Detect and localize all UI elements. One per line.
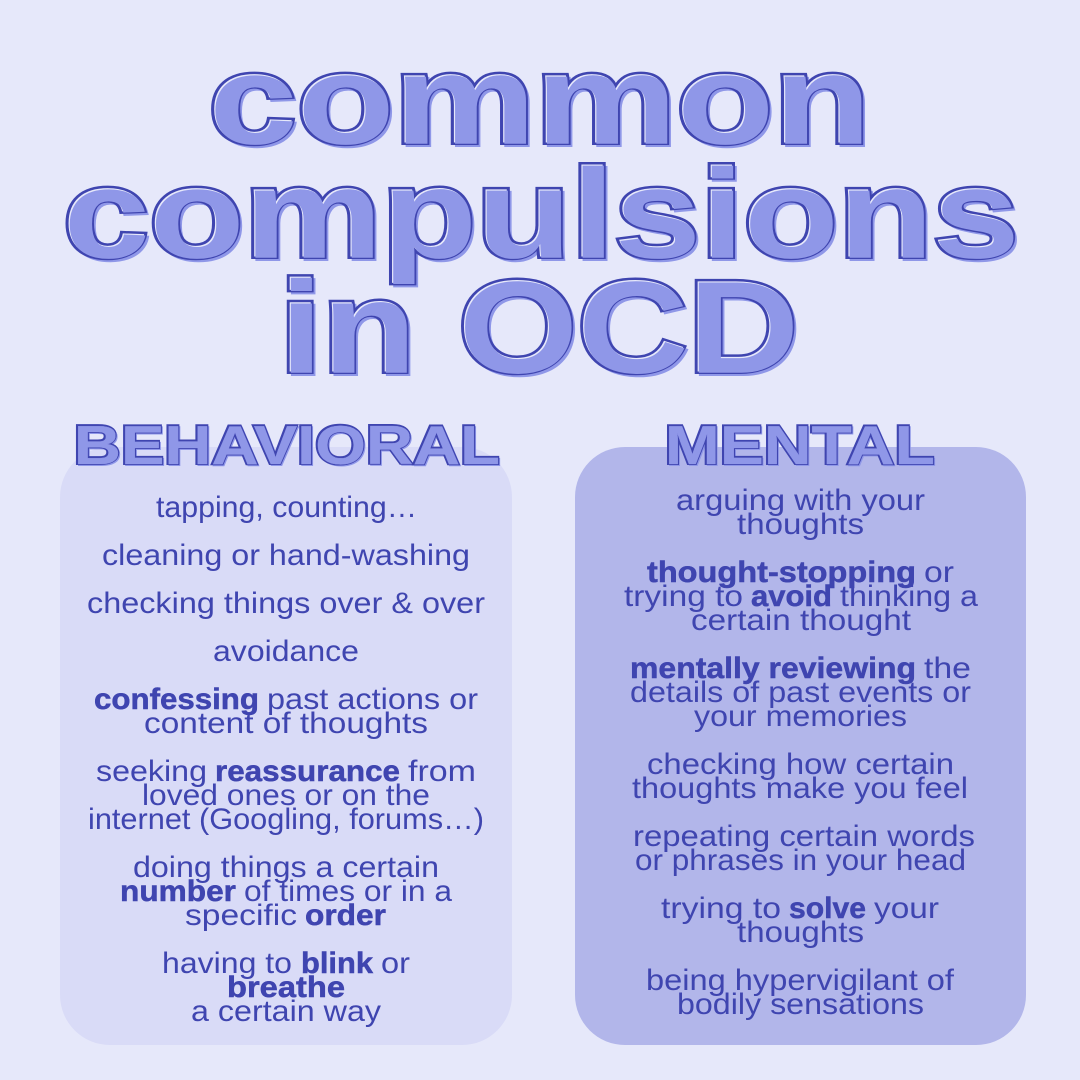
list: behavioral compulsions: or — [381, 947, 410, 980]
list: mental compulsions: certain thought — [691, 604, 912, 637]
heading: mental: MENTAL — [665, 414, 935, 476]
list: behavioral compulsions — [87, 491, 485, 1028]
list: behavioral compulsions: blink — [301, 947, 373, 980]
list: mental compulsions: arguing with your — [676, 484, 925, 517]
list: mental compulsions: your — [874, 892, 939, 925]
title line: common: common — [208, 28, 870, 170]
list: mental compulsions: or — [924, 556, 954, 589]
title line: in OCD: in OCD — [279, 252, 798, 400]
list: behavioral compulsions: number — [120, 875, 236, 908]
list: behavioral compulsions: breathe — [227, 971, 345, 1004]
list: mental compulsions: the — [924, 652, 971, 685]
title line: in OCD: in OCD — [282, 256, 801, 402]
list: behavioral compulsions: avoidance — [213, 635, 359, 668]
list: behavioral compulsions: checking things over & over — [87, 587, 485, 620]
list: behavioral compulsions: internet (Googling, forums…) — [88, 803, 484, 836]
list: behavioral compulsions: having to — [162, 947, 292, 980]
list: behavioral compulsions: past actions or — [267, 683, 478, 716]
list: mental compulsions: checking how certain — [647, 748, 954, 781]
title line: common: common — [209, 29, 871, 171]
title line: compulsions: compulsions — [62, 142, 1018, 284]
list: behavioral compulsions: loved ones or on the — [142, 779, 430, 812]
title line: compulsions: compulsions — [64, 143, 1020, 285]
panel: behavioral background — [60, 447, 512, 1045]
title line: compulsions: compulsions — [66, 144, 1022, 286]
list: mental compulsions: trying to — [661, 892, 781, 925]
heading: mental: MENTAL — [666, 415, 936, 477]
list: mental compulsions: thoughts — [737, 916, 864, 949]
title line: compulsions: compulsions — [62, 142, 1018, 284]
list: behavioral compulsions: a certain way — [191, 995, 381, 1028]
title — [62, 28, 1022, 402]
list: mental compulsions: bodily sensations — [677, 988, 924, 1021]
list: behavioral compulsions: cleaning or hand-washing — [102, 539, 470, 572]
list: mental compulsions: thoughts — [737, 508, 864, 541]
list: mental compulsions — [624, 484, 978, 1021]
list: mental compulsions: thought-stopping — [647, 556, 916, 589]
list: behavioral compulsions: of times or in a — [244, 875, 452, 908]
heading: mental: MENTAL — [664, 413, 934, 475]
list: mental compulsions: solve — [789, 892, 866, 925]
list: mental compulsions: or phrases in your head — [635, 844, 966, 877]
title line: in OCD: in OCD — [280, 254, 799, 401]
list: mental compulsions: your memories — [694, 700, 907, 733]
heading: behavioral: BEHAVIORAL — [73, 413, 499, 475]
list: behavioral compulsions: content of thoughts — [144, 707, 428, 740]
panel: mental background — [575, 447, 1026, 1045]
list: behavioral compulsions: from — [408, 755, 476, 788]
list: mental compulsions: thinking a — [840, 580, 978, 613]
list: mental compulsions: repeating certain words — [633, 820, 975, 853]
list: mental compulsions: details of past events or — [630, 676, 971, 709]
title line: common: common — [211, 30, 873, 172]
list: mental compulsions: being hypervigilant of — [646, 964, 955, 997]
heading: behavioral: BEHAVIORAL — [75, 415, 501, 477]
list: behavioral compulsions: reassurance — [215, 755, 400, 788]
list: behavioral compulsions: confessing — [94, 683, 259, 716]
list: behavioral compulsions: doing things a certain — [133, 851, 439, 884]
list: behavioral compulsions: seeking — [96, 755, 207, 788]
list: mental compulsions: avoid — [751, 580, 832, 613]
title line: common: common — [208, 28, 870, 170]
list: mental compulsions: trying to — [624, 580, 743, 613]
list: behavioral compulsions: order — [305, 899, 386, 932]
list: mental compulsions: thoughts make you feel — [632, 772, 968, 805]
heading: behavioral: BEHAVIORAL — [74, 414, 500, 476]
list: mental compulsions: mentally reviewing — [630, 652, 916, 685]
title line: in OCD: in OCD — [279, 252, 798, 400]
list: behavioral compulsions: specific — [185, 899, 297, 932]
list: behavioral compulsions: tapping, counting… — [156, 491, 417, 524]
